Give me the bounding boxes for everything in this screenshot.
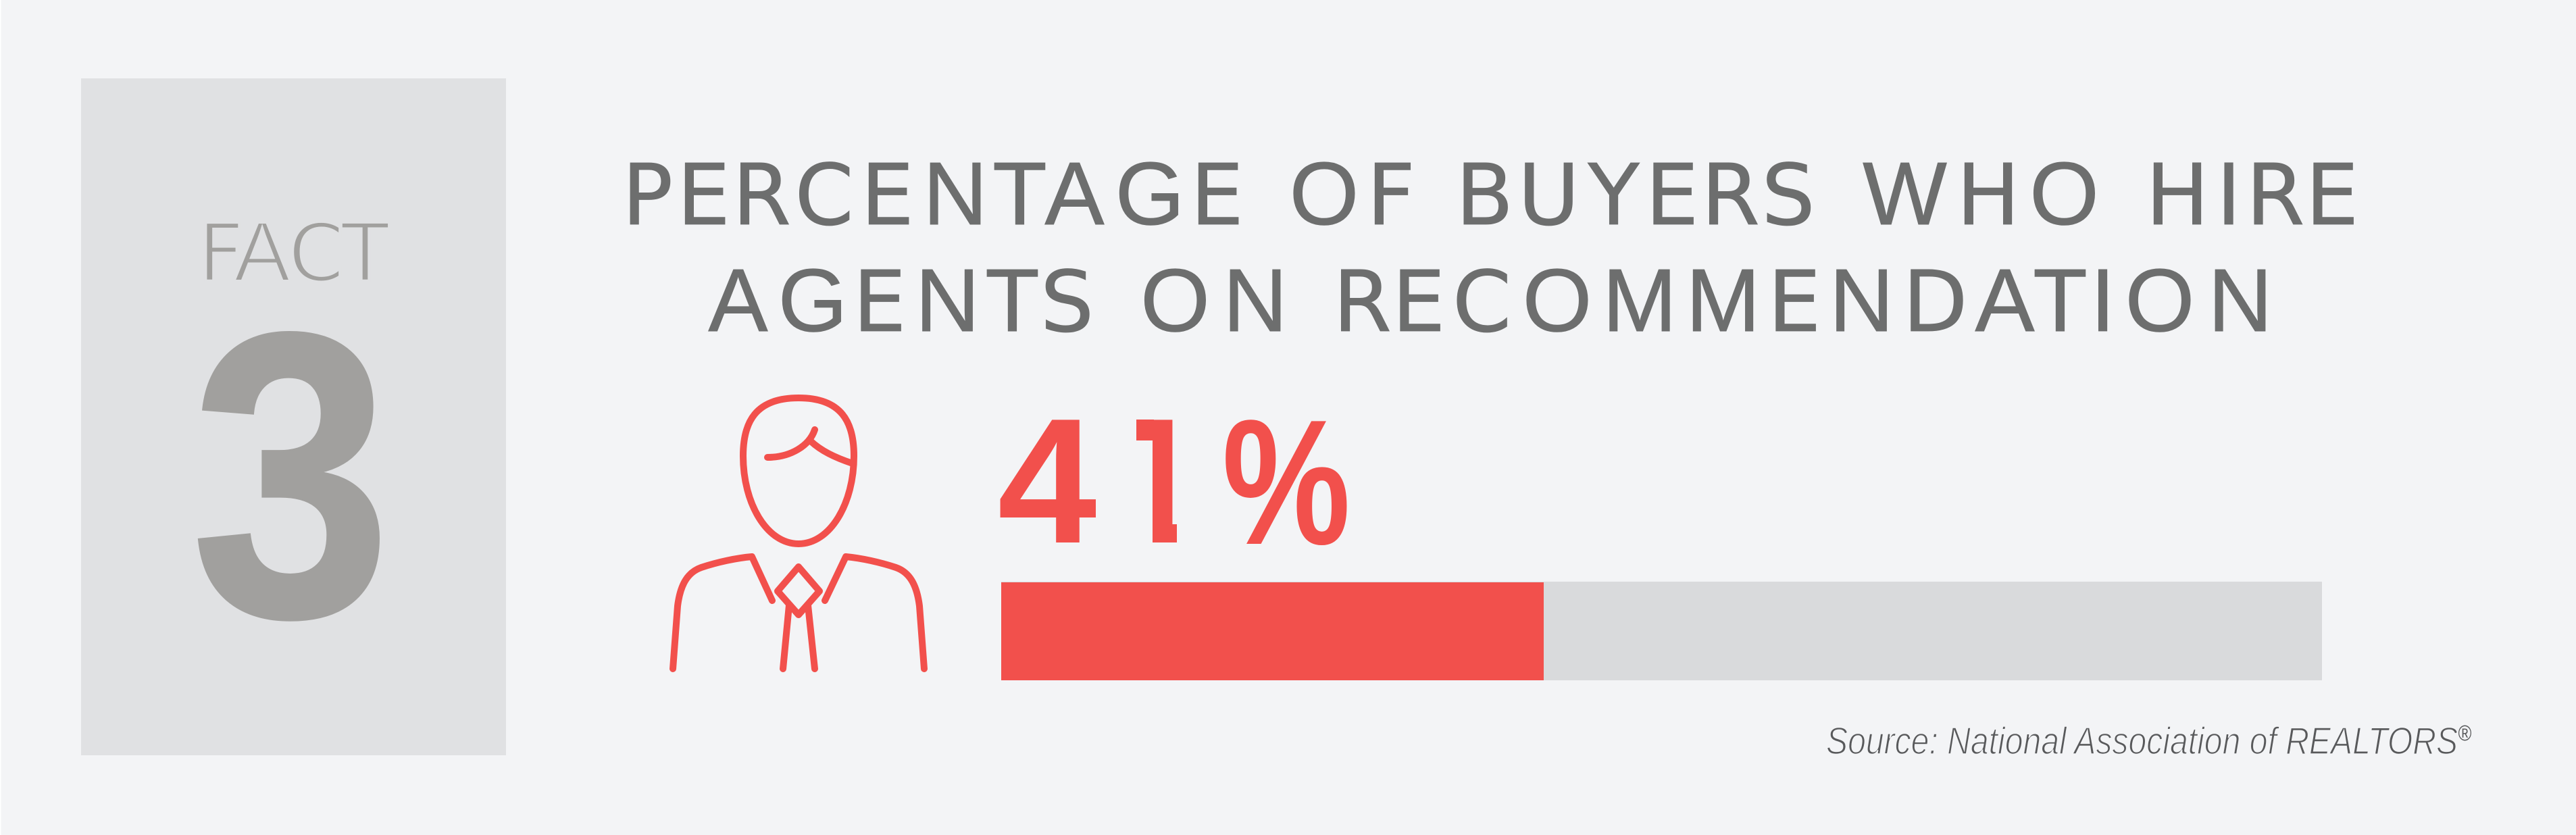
icon: tie xyxy=(778,567,819,669)
bar fill: 41% xyxy=(1001,582,1544,680)
icon: hair xyxy=(767,430,853,463)
source note: Source: National Association of REALTORS xyxy=(1826,719,2575,763)
source note: ® xyxy=(2458,721,2471,745)
heading line 1: PERCENTAGE OF BUYERS WHO HIRE xyxy=(622,144,2358,245)
label: FACT: FACT xyxy=(198,204,391,301)
icon: head xyxy=(743,398,854,544)
heading xyxy=(622,144,2358,351)
numeral: 3: 3 xyxy=(191,249,391,702)
icon: businessman xyxy=(673,398,924,669)
stat: 41% xyxy=(998,381,1350,582)
heading line 2: AGENTS ON RECOMMENDATION xyxy=(708,251,2273,351)
bar track xyxy=(1001,582,2322,680)
progress bar xyxy=(1001,582,2322,680)
stat: 41%: % xyxy=(1222,383,1350,582)
icon: left shoulder and lapel xyxy=(673,557,772,669)
icon: right shoulder and lapel xyxy=(825,557,924,669)
stat: 41%: 41 xyxy=(998,381,1205,580)
panel: fact number xyxy=(81,78,506,755)
